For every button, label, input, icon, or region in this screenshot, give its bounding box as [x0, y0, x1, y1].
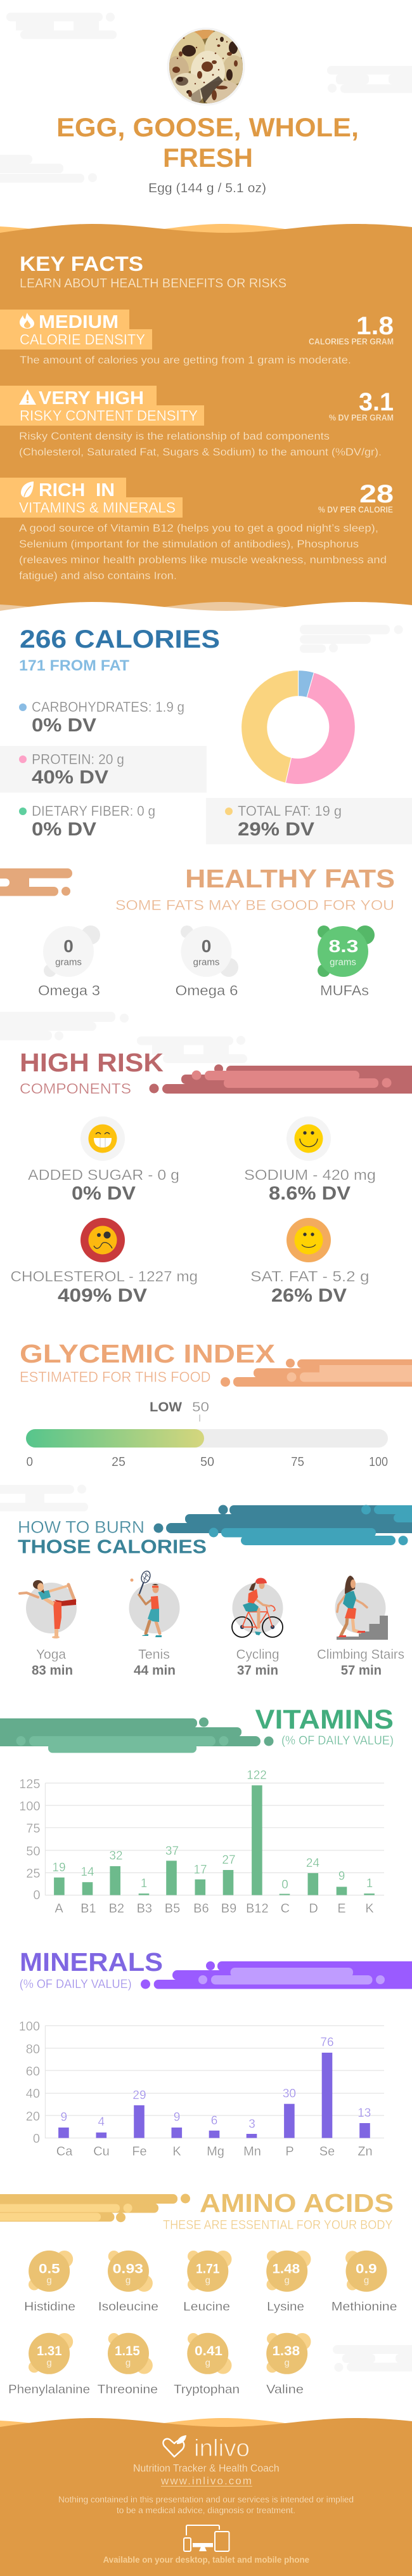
fact: calorie density: CALORIE DENSITY — [20, 331, 145, 348]
amino: lysine: g — [285, 2275, 290, 2285]
fact: vitamins and minerals: RICH IN — [39, 480, 115, 500]
omega 6: 0 — [202, 936, 211, 956]
banner shape — [150, 1064, 412, 1094]
amino: threonine: 1.15 — [115, 2344, 140, 2358]
fact: calorie density: CALORIES PER GRAM — [309, 337, 394, 346]
bar chart: minerals: 40 — [26, 2087, 40, 2101]
bar chart: vitamins: 25 — [26, 1867, 41, 1881]
amino: histidine: g — [46, 2275, 52, 2285]
panel: healthy fats: HEALTHY FATS — [185, 864, 395, 893]
activity labels: 83 min — [32, 1663, 73, 1678]
fact: vitamins and minerals: % DV PER CALORIE — [318, 505, 393, 514]
omega 6 — [175, 925, 238, 998]
amino: isoleucine: 0.93 — [113, 2261, 143, 2276]
bar chart: minerals: 80 — [26, 2043, 40, 2056]
bar chart: minerals: 6 — [211, 2114, 217, 2128]
panel: vitamins: VITAMINS — [255, 1704, 394, 1735]
amino: lysine: 1.48 — [273, 2261, 300, 2276]
bar chart: vitamins: B9 — [221, 1902, 236, 1916]
title — [56, 112, 359, 173]
title: FRESH — [163, 143, 253, 173]
legend: dietary fiber: DIETARY FIBER: 0 g — [32, 803, 155, 819]
panel: vitamins — [0, 1704, 394, 1916]
omega 6: Omega 6 — [175, 983, 238, 998]
activity labels: Yoga — [36, 1647, 66, 1662]
panel: glycemic index — [20, 1339, 412, 1469]
bar chart: minerals: K — [172, 2145, 181, 2159]
bar chart: vitamins: 27 — [222, 1854, 236, 1867]
amino: lysine: Lysine — [267, 2299, 304, 2313]
fact: vitamins and minerals: A good source of Vitamin B12 (helps you to get a good night’s sleep), — [19, 523, 378, 534]
amino: isoleucine: g — [126, 2275, 131, 2285]
legend: carbohydrates: CARBOHYDRATES: 1.9 g — [32, 699, 184, 715]
subheading: key facts: LEARN ABOUT HEALTH BENEFITS OR RISKS — [20, 277, 286, 291]
amino: tryptophan: Tryptophan — [174, 2383, 240, 2396]
bar chart: vitamins: 122 — [247, 1769, 267, 1782]
fact: risky content density: VERY HIGH — [39, 388, 144, 409]
activity labels: 37 min — [237, 1663, 278, 1678]
panel: high risk: COMPONENTS — [20, 1080, 131, 1097]
bar chart: minerals: 13 — [357, 2107, 371, 2120]
amino: isoleucine — [98, 2251, 158, 2313]
panel: amino acids: THESE ARE ESSENTIAL FOR YOUR BODY — [163, 2218, 393, 2232]
bar chart: vitamins: 1 — [141, 1877, 147, 1890]
bar chart: vitamins — [19, 1769, 384, 1916]
activity labels — [32, 1647, 404, 1678]
cholesterol: CHOLESTEROL - 1227 mg — [10, 1268, 198, 1285]
bar chart: vitamins: 1 — [366, 1877, 373, 1890]
bar chart: vitamins: D — [309, 1902, 318, 1916]
amino: leucine: g — [205, 2275, 210, 2285]
bar chart: minerals: 4 — [98, 2115, 105, 2129]
icon: warning — [19, 389, 36, 405]
logo: inlivo — [163, 2435, 250, 2462]
amino: methionine: Methionine — [332, 2299, 397, 2313]
panel: healthy fats — [0, 864, 395, 998]
bar chart: minerals: Mn — [243, 2145, 261, 2159]
bar chart: minerals: 0 — [33, 2132, 40, 2146]
heading: key facts: KEY FACTS — [20, 252, 143, 275]
sodium: SODIUM - 420 mg — [244, 1167, 376, 1183]
bar chart: minerals: 9 — [61, 2111, 67, 2124]
subheading: calories from fat: 171 FROM FAT — [19, 657, 129, 674]
fact: vitamins and minerals: Selenium (important for the stimulation of antibodies), Phosphorus — [19, 539, 359, 550]
added sugar: ADDED SUGAR - 0 g — [28, 1167, 179, 1183]
disclaimer: Nothing contained in this presentation and our services is intended or implied — [58, 2495, 354, 2504]
gauge scale — [27, 1455, 388, 1469]
fact: vitamins and minerals — [0, 478, 394, 582]
bar chart: minerals: 3 — [248, 2117, 255, 2131]
omega 3: Omega 3 — [38, 983, 100, 998]
amino: methionine: 0.9 — [356, 2261, 377, 2276]
bar chart: minerals: 100 — [19, 2020, 40, 2034]
panel: glycemic index: ESTIMATED FOR THIS FOOD — [20, 1369, 210, 1385]
bar chart: minerals: Cu — [93, 2145, 110, 2159]
amino: leucine: Leucine — [183, 2299, 230, 2313]
amino: phenylalanine — [8, 2333, 90, 2396]
bar chart: vitamins: B5 — [165, 1902, 180, 1916]
gauge scale: 25 — [112, 1455, 126, 1469]
banner shape — [0, 1718, 274, 1753]
legend: carbohydrates: 0% DV — [32, 715, 96, 736]
bar chart: vitamins: 14 — [80, 1866, 94, 1879]
banner shape — [221, 1359, 412, 1387]
amino: methionine: g — [364, 2275, 369, 2285]
icon: leaf — [21, 481, 34, 497]
panel: amino acids: AMINO ACIDS — [200, 2188, 394, 2218]
bar chart: minerals: Se — [319, 2145, 335, 2159]
bar chart: vitamins: E — [337, 1902, 346, 1916]
icon: flame — [20, 313, 34, 329]
fact: risky content density: % DV PER GRAM — [329, 413, 394, 422]
fact: vitamins and minerals: 28 — [359, 480, 394, 508]
bar chart: vitamins: 24 — [306, 1857, 319, 1870]
icon: devices — [184, 2525, 229, 2551]
amino: lysine — [266, 2251, 311, 2313]
activity labels: 44 min — [134, 1663, 176, 1678]
panel: vitamins: (% OF DAILY VALUE) — [281, 1734, 394, 1748]
activity: tennis — [129, 1570, 180, 1637]
panel: key facts — [0, 224, 412, 622]
fact: risky content density — [0, 386, 394, 458]
donut chart: macronutrients — [241, 670, 355, 785]
fact: calorie density: 1.8 — [356, 312, 394, 340]
amino: histidine: 0.5 — [39, 2261, 60, 2276]
fact: vitamins and minerals: VITAMINS & MINERALS — [19, 499, 176, 516]
amino: histidine — [24, 2251, 75, 2313]
availability note: Available on your desktop, tablet and mobile phone — [103, 2554, 309, 2565]
bar chart: minerals: Mg — [207, 2145, 224, 2159]
fact: risky content density: Risky Content density is the relationship of bad components — [19, 431, 330, 442]
amino: valine: Valine — [266, 2383, 304, 2396]
panel: minerals — [19, 1947, 412, 2159]
bar chart: vitamins: 32 — [109, 1850, 123, 1863]
fact: calorie density: MEDIUM — [39, 312, 119, 332]
fact: calorie density: The amount of calories you are getting from 1 gram is moderate. — [20, 355, 351, 366]
legend: protein: PROTEIN: 20 g — [32, 751, 124, 768]
bar chart: vitamins: 37 — [165, 1845, 179, 1858]
omega 3 — [38, 925, 100, 998]
mufas: grams — [330, 957, 356, 968]
panel: high risk: HIGH RISK — [20, 1048, 164, 1077]
legend: protein — [0, 746, 207, 793]
logo: inlivo: inlivo — [194, 2435, 250, 2462]
amino: leucine — [183, 2251, 232, 2313]
amino: phenylalanine: g — [46, 2358, 52, 2369]
omega 3: grams — [55, 957, 82, 968]
legend: dietary fiber — [19, 803, 155, 840]
cholesterol: 409% DV — [58, 1285, 147, 1306]
bar chart: vitamins: 50 — [26, 1845, 41, 1859]
panel: glycemic index: 50 — [192, 1400, 209, 1415]
panel: minerals: (% OF DAILY VALUE) — [20, 1978, 132, 1991]
bar chart: minerals: P — [285, 2145, 294, 2159]
gauge bar — [26, 1429, 388, 1448]
gauge scale: 75 — [291, 1455, 304, 1469]
saturated fat: 26% DV — [271, 1285, 347, 1306]
mufas: 8.3 — [328, 936, 359, 956]
sodium — [244, 1116, 376, 1204]
amino: isoleucine: Isoleucine — [98, 2299, 158, 2313]
bar chart: vitamins: 19 — [52, 1861, 66, 1874]
amino: leucine: 1.71 — [196, 2261, 220, 2276]
bar chart: minerals: 20 — [26, 2110, 40, 2124]
activity labels: Tenis — [138, 1647, 170, 1662]
bar chart: vitamins: 125 — [19, 1777, 41, 1791]
bar chart: vitamins: K — [365, 1902, 374, 1916]
amino: threonine: g — [126, 2358, 131, 2369]
fact: calorie density — [0, 310, 394, 366]
fact: risky content density: RISKY CONTENT DENSITY — [20, 407, 198, 424]
amino: phenylalanine: Phenylalanine — [8, 2383, 90, 2396]
bar chart: vitamins: 100 — [19, 1800, 41, 1814]
website: www.inlivo.com — [160, 2475, 252, 2487]
added sugar: 0% DV — [72, 1183, 136, 1204]
banner shape — [141, 1961, 412, 1989]
fact: vitamins and minerals: (releaves minor health problems like muscle weakness, numbness and — [19, 554, 387, 566]
bar chart: vitamins: B3 — [137, 1902, 152, 1916]
fact: vitamins and minerals: fatigue) and also contains Iron. — [19, 570, 177, 582]
banner shape — [153, 1505, 412, 1545]
disclaimer — [58, 2495, 354, 2515]
panel: glycemic index: GLYCEMIC INDEX — [20, 1339, 275, 1368]
amino: threonine — [98, 2333, 158, 2396]
title: EGG, GOOSE, WHOLE, — [56, 112, 359, 142]
disclaimer: to be a medical advice, diagnosis or treatment. — [117, 2506, 295, 2515]
activity labels: 57 min — [341, 1663, 382, 1678]
activity labels: Climbing Stairs — [317, 1647, 404, 1662]
tagline: Nutrition Tracker & Health Coach — [133, 2462, 280, 2475]
activity: climbing stairs — [335, 1576, 388, 1640]
bar chart: vitamins: 9 — [338, 1870, 345, 1883]
legend: total fat — [206, 798, 412, 844]
cholesterol — [10, 1218, 198, 1306]
amino: threonine: Threonine — [98, 2383, 158, 2396]
saturated fat: SAT. FAT - 5.2 g — [250, 1268, 369, 1285]
bar chart: vitamins: A — [55, 1902, 63, 1916]
bar chart: minerals: 76 — [320, 2036, 334, 2050]
amino: valine: g — [285, 2358, 290, 2369]
gauge scale: 100 — [369, 1455, 388, 1469]
gauge scale: 50 — [200, 1455, 214, 1469]
activity: yoga — [20, 1580, 77, 1638]
bar chart: minerals: 9 — [174, 2111, 180, 2124]
fact: risky content density: (Cholesterol, Saturated Fat, Sugars & Sodium) to the amount (%DV/gr). — [19, 447, 382, 458]
activity labels: Cycling — [236, 1647, 279, 1662]
omega 3: 0 — [63, 936, 74, 956]
amino: valine: 1.38 — [273, 2344, 300, 2358]
amino: tryptophan — [174, 2333, 240, 2396]
fact: risky content density: 3.1 — [359, 388, 394, 416]
legend: total fat: 29% DV — [238, 819, 314, 840]
bar chart: vitamins: C — [281, 1902, 290, 1916]
added sugar — [28, 1116, 179, 1204]
bar chart: vitamins: B2 — [109, 1902, 124, 1916]
amino: histidine: Histidine — [24, 2299, 75, 2313]
amino: phenylalanine: 1.31 — [37, 2344, 62, 2358]
bar chart: minerals — [19, 2020, 384, 2159]
mufas — [318, 925, 375, 998]
legend: dietary fiber: 0% DV — [32, 819, 96, 840]
footer — [0, 2418, 412, 2576]
amino: tryptophan: 0.41 — [195, 2344, 222, 2358]
sodium: 8.6% DV — [269, 1183, 351, 1204]
legend: carbohydrates — [19, 699, 184, 736]
amino: valine — [266, 2333, 311, 2396]
bar chart: minerals: 29 — [132, 2089, 146, 2102]
bar chart: vitamins: B6 — [193, 1902, 209, 1916]
amino: tryptophan: g — [205, 2358, 210, 2369]
bar chart: vitamins: B1 — [80, 1902, 96, 1916]
bar chart: minerals: Zn — [357, 2145, 373, 2159]
bar chart: vitamins: B12 — [246, 1902, 269, 1916]
panel: minerals: MINERALS — [20, 1947, 163, 1977]
heading: calories: 266 CALORIES — [20, 625, 220, 653]
food photo: speckled eggs — [167, 28, 245, 105]
panel: how to burn — [18, 1505, 412, 1678]
bar chart: vitamins: 17 — [193, 1863, 207, 1876]
bar chart: vitamins: 0 — [33, 1888, 41, 1902]
mufas: MUFAs — [320, 983, 369, 998]
bar chart: minerals: Ca — [56, 2145, 73, 2159]
panel: how to burn: THOSE CALORIES — [18, 1536, 207, 1558]
bar chart: minerals: 60 — [26, 2065, 40, 2079]
activity: cycling — [232, 1578, 283, 1637]
amino: methionine — [332, 2251, 397, 2313]
serving size: Egg (144 g / 5.1 oz) — [148, 181, 266, 195]
panel: amino acids — [0, 2188, 397, 2396]
panel: high risk — [10, 1048, 412, 1306]
bar chart: vitamins: 0 — [281, 1878, 288, 1892]
bar chart: vitamins: 75 — [26, 1822, 41, 1836]
banner shape — [0, 868, 72, 896]
panel: how to burn: HOW TO BURN — [18, 1517, 145, 1536]
omega 6: grams — [193, 957, 219, 968]
gauge scale: 0 — [27, 1455, 33, 1469]
bar chart: minerals: Fe — [132, 2145, 147, 2159]
legend: protein: 40% DV — [32, 767, 108, 788]
saturated fat — [250, 1218, 369, 1306]
banner shape — [0, 2194, 190, 2222]
panel: healthy fats: SOME FATS MAY BE GOOD FOR YOU — [115, 897, 394, 913]
bar chart: minerals: 30 — [283, 2088, 296, 2101]
panel: glycemic index: LOW — [150, 1400, 182, 1415]
legend: total fat: TOTAL FAT: 19 g — [238, 803, 342, 819]
